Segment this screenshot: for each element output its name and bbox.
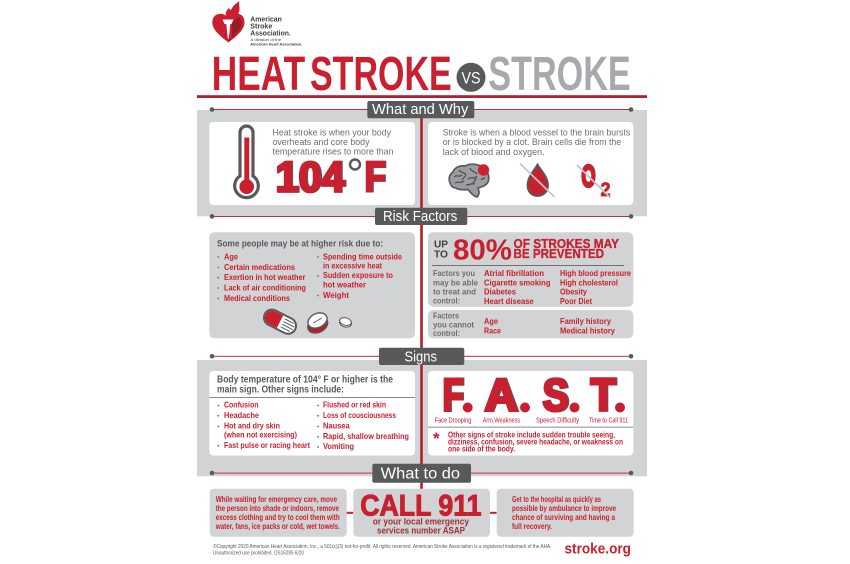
text: stroke explanation: Stroke is when a blood vessel to the brain bursts (443, 127, 631, 137)
list: risk factors column two: Spending time outside (323, 252, 402, 261)
list: treatable factors column two: Obesity (560, 288, 587, 296)
text: signs intro: main sign. Other signs include: (217, 384, 344, 396)
panel: heat stroke signs (209, 371, 415, 456)
callout: up to 80 percent of strokes may be prevented: 80% (453, 234, 512, 266)
labels: F.A.S.T. meanings: Face Drooping (435, 417, 471, 424)
heading: Signs: Signs (404, 348, 437, 366)
logo wordmark: American Heart Association. (250, 42, 302, 47)
text: cooling advice: excess clothing and try to cool them with (216, 513, 340, 522)
icon: crossed-out oxygen: 2 (600, 180, 610, 201)
callout: up to 80 percent of strokes may be prevented: BE PREVENTED (514, 247, 604, 261)
list: signs column two (317, 401, 409, 451)
panel: get to the hospital (497, 489, 634, 537)
text: stroke explanation: or is blocked by a clot. Brain cells die from the (443, 137, 621, 147)
list: risk factors column two: hot weather (323, 280, 367, 290)
text: heat stroke explanation (272, 128, 394, 157)
list: uncontrollable factors: Age (484, 317, 498, 326)
panel: heat stroke risk factors (209, 232, 415, 338)
text: heat stroke explanation: overheats and core body (272, 137, 370, 147)
acronym: F.A.S.T. (442, 369, 625, 420)
footer: copyright: ©Copyright 2020 American Heart Association, Inc., a 501(c)(3) not-for-profit. All rights reserved. American Stroke Association is a registered trademark of the AHA. (213, 543, 552, 550)
footer: copyright (213, 543, 552, 556)
text: factors you can control (433, 269, 478, 306)
text: factors you can control: Factors you (433, 269, 475, 278)
list: risk factors column one: Exertion in hot weather (224, 273, 306, 282)
title: Heat Stroke vs Stroke: STROKE (488, 48, 631, 101)
list: signs column one: Confusion (224, 401, 259, 410)
icon: asterisk: * (433, 429, 440, 448)
list: treatable factors column one: Diabetes (484, 288, 516, 296)
callout: up to 80 percent of strokes may be prevented: TO (434, 249, 448, 261)
title: Heat Stroke vs Stroke: HEAT (212, 48, 305, 101)
text: other signs of stroke: one side of the body. (448, 444, 515, 454)
footer: website: stroke.org (564, 542, 631, 558)
text: cannot control label: you cannot (433, 320, 474, 329)
list: signs column one: (when not exercising) (224, 431, 297, 440)
list: risk factors column one: Lack of air conditioning (224, 284, 306, 292)
list: signs column two: Nausea (323, 422, 350, 431)
list: treatable factors column two (560, 269, 631, 306)
icon: thermometer (235, 126, 258, 198)
text: cooling advice (215, 495, 340, 531)
list: treatable factors column two: Poor Diet (560, 297, 592, 306)
big number: 104 degrees F (276, 154, 386, 202)
panel: preventable strokes (428, 232, 633, 307)
list: signs column two: Rapid, shallow breathing (323, 432, 409, 441)
heading: Risk Factors: Risk Factors (383, 208, 457, 225)
acronym: F.A.S.T.: T (590, 369, 616, 420)
text: cooling advice: water, fans, ice packs or cold, wet towels. (215, 522, 340, 531)
text: heat stroke explanation: temperature rises to more than (272, 147, 394, 157)
list: risk factors column two (317, 252, 402, 300)
big number: 104 degrees F: 104 (276, 154, 345, 202)
text: other signs of stroke: dizziness, confusion, severe headache, or weakness on (448, 438, 623, 446)
panel: factors you cannot control (428, 310, 633, 338)
list: risk factors column two: Sudden exposure to (323, 271, 393, 280)
logo wordmark: American (250, 15, 282, 24)
text: signs intro: Body temperature of 104° F or higher is the (217, 374, 394, 385)
list: risk factors column one: Age (224, 252, 238, 261)
title: Heat Stroke vs Stroke: VS (462, 68, 480, 88)
panel: stroke definition (428, 122, 633, 205)
callout: up to 80 percent of strokes may be prevented: OF STROKES MAY (514, 237, 620, 251)
text: signs intro (217, 374, 394, 396)
text: factors you can control: may be able (433, 278, 478, 288)
text: cannot control label: control: (433, 329, 460, 338)
text: hospital advice: chance of surviving and having a (512, 513, 615, 522)
list: signs column two: Loss of cousciousness (323, 411, 396, 420)
heading: What to do: What to do (381, 466, 460, 483)
icon: brain with clot (449, 164, 489, 197)
labels: F.A.S.T. meanings: Arm Weakness (483, 417, 521, 424)
logo wordmark: Stroke (250, 22, 272, 31)
text: risk intro: Some people may be at higher risk due to: (217, 239, 383, 249)
list: uncontrollable factors: Family history (560, 317, 611, 326)
list: signs column two: Vomiting (323, 442, 354, 451)
heading: Signs (379, 348, 464, 366)
logo wordmark: A division of the (250, 37, 281, 42)
section band: What and Why (197, 110, 647, 216)
acronym: F.A.S.T.: A (484, 369, 518, 420)
callout: up to 80 percent of strokes may be prevented (434, 234, 620, 266)
panel: heat stroke definition (209, 122, 415, 205)
list: treatable factors column two: High cholesterol (560, 278, 618, 288)
icon: crossed-out blood drop (520, 164, 554, 197)
text: cooling advice: While waiting for emergency care, move (216, 495, 337, 504)
list: treatable factors column one: Atrial fibrillation (484, 269, 544, 278)
labels: F.A.S.T. meanings: Speech Difficulty (536, 417, 579, 424)
acronym: F.A.S.T.: S (542, 369, 568, 420)
text: hospital advice (512, 495, 616, 531)
list: uncontrollable factors (484, 317, 615, 336)
callout: Call 911: CALL 911 (360, 490, 482, 522)
labels: F.A.S.T. meanings: Time to Call 911 (589, 417, 628, 424)
acronym: F.A.S.T.: F (442, 369, 464, 420)
section band: Signs (197, 360, 647, 476)
list: signs column two: Flushed or red skin (323, 401, 386, 410)
text: hospital advice: full recovery. (512, 522, 552, 531)
text: cooling advice: the person into shade or indoors, remove (216, 504, 339, 513)
list: uncontrollable factors: Race (484, 326, 501, 336)
title: Heat Stroke vs Stroke (212, 48, 631, 101)
text: factors you can control: to treat and (433, 288, 476, 297)
list: risk factors column one (217, 252, 306, 303)
text: cannot control label: Factors (433, 311, 459, 320)
text: other signs of stroke (448, 430, 623, 454)
text: cannot control label (433, 311, 474, 338)
text: heat stroke explanation: Heat stroke is when your body (272, 128, 391, 138)
title: Heat Stroke vs Stroke: STROKE (310, 48, 452, 101)
text: hospital advice: Get to the hospital as quickly as (512, 495, 601, 504)
panel: F.A.S.T. stroke signs (428, 369, 633, 456)
list: signs column one: Hot and dry skin (224, 422, 280, 431)
labels: F.A.S.T. meanings (435, 417, 628, 424)
list: signs column one (217, 401, 310, 450)
list: treatable factors column one (484, 269, 551, 306)
panel: call 911 (353, 489, 490, 537)
text: factors you can control: control: (433, 296, 460, 306)
logo wordmark (250, 15, 302, 47)
icon: crossed-out oxygen (577, 158, 610, 201)
list: risk factors column two: Weight (323, 291, 349, 300)
list: risk factors column one: Certain medications (224, 263, 295, 272)
list: signs column one: Fast pulse or racing heart (224, 441, 310, 450)
icon: capsule and pills (261, 307, 352, 337)
logo wordmark: Association. (250, 29, 291, 38)
big number: 104 degrees F: F (364, 154, 386, 202)
list: treatable factors column one: Cigarette smoking (484, 278, 551, 288)
text: stroke explanation: lack of blood and oxygen. (443, 147, 545, 157)
list: treatable factors column two: High blood pressure (560, 269, 631, 278)
panel: what to do while waiting (210, 489, 347, 537)
text: hospital advice: possible by ambulance to improve (512, 504, 616, 513)
text: stroke explanation (443, 127, 631, 157)
footer: copyright: Unauthorized use prohibited. DS16285 6/20 (213, 550, 304, 556)
text: local emergency number (373, 517, 470, 536)
list: signs column one: Headache (224, 411, 259, 420)
list: treatable factors column one: Heart disease (484, 297, 534, 306)
icon: heart and torch (212, 1, 244, 42)
heading: What and Why: What and Why (372, 101, 469, 118)
text: local emergency number: services number ASAP (377, 526, 465, 536)
list: risk factors column one: Medical conditions (224, 294, 290, 303)
callout: up to 80 percent of strokes may be prevented: UP (434, 239, 448, 251)
icon: crossed-out oxygen: O (582, 158, 596, 194)
text: other signs of stroke: Other signs of stroke include sudden trouble seeing, (448, 430, 615, 439)
list: uncontrollable factors: Medical history (560, 326, 615, 336)
list: risk factors column two: in excessive heat (323, 262, 382, 270)
text: local emergency number: or your local emergency (373, 517, 470, 527)
logo: American Stroke Association (212, 1, 302, 47)
